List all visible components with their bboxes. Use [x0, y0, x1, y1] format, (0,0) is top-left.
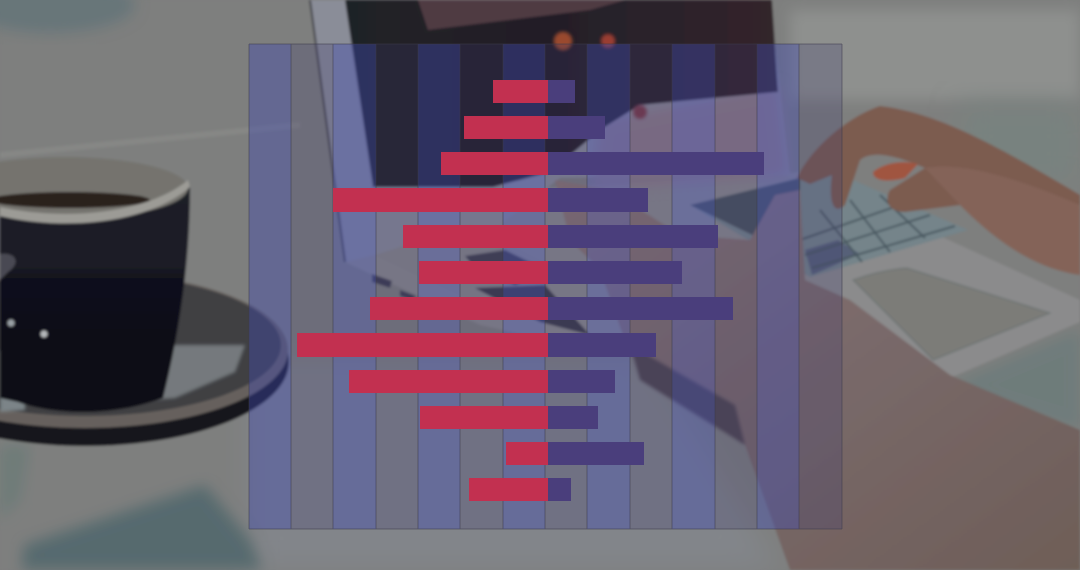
photo: laptop base	[345, 172, 1080, 378]
photo: lit screen reflection	[590, 85, 788, 190]
photo: screen highlights	[418, 0, 647, 119]
photo: coffee cup	[0, 157, 190, 412]
photo: hand shadow edge	[630, 345, 745, 445]
red bars, extending left	[297, 80, 548, 501]
photo: laptop lid	[310, 0, 790, 262]
photo: near hand and forearm	[555, 180, 1080, 570]
purple bars, extending right	[548, 80, 764, 501]
photo: keyboard	[690, 170, 968, 277]
bar chart: diverging bars	[297, 80, 764, 501]
light column stripes	[249, 44, 799, 529]
dark column stripes	[291, 44, 842, 529]
photo: laptop screen	[345, 0, 778, 187]
photo: hand on keyboard	[797, 106, 1080, 275]
photo: saucer	[0, 272, 289, 446]
photo: laptop corner and ports	[372, 225, 590, 335]
photo: trackpad	[853, 268, 1050, 360]
chart panel: striped columns	[249, 44, 842, 529]
